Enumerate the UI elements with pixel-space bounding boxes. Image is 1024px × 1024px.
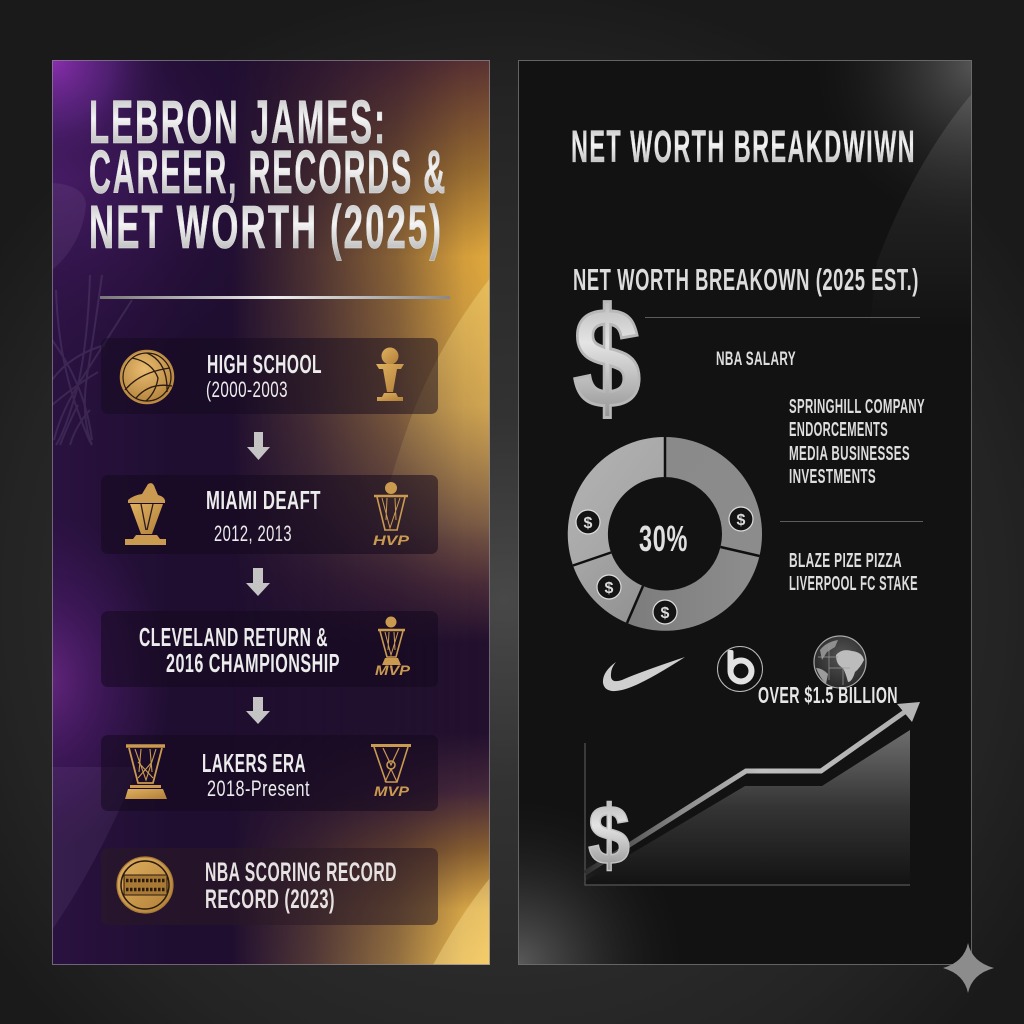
list: businesses: SPRINGHILL COMPANY xyxy=(789,396,925,418)
dollar badge: $ xyxy=(737,512,746,529)
card: cleveland xyxy=(101,611,438,687)
panel: career: CAREER, RECORDS & xyxy=(89,138,447,206)
dollar badge: $ xyxy=(584,515,593,532)
card: scoring record xyxy=(101,848,438,925)
heading: record 2023: RECORD (2023) xyxy=(205,884,335,914)
icon: trophy xyxy=(125,483,166,545)
list: stakes xyxy=(789,550,918,595)
icon: globe xyxy=(814,636,866,688)
icon: mvp trophy xyxy=(375,616,411,678)
icon: hvp trophy xyxy=(373,482,410,548)
heading: cleveland return: CLEVELAND RETURN & xyxy=(139,622,328,652)
list: businesses: ENDORCEMENTS xyxy=(789,419,888,441)
dollar badge xyxy=(597,575,621,599)
label: over 1.5 billion: OVER $1.5 BILLION xyxy=(758,682,898,708)
icon: hvp trophy: HVP xyxy=(373,532,410,548)
title divider xyxy=(100,296,450,299)
heading: miami: MIAMI DEAFT xyxy=(206,485,321,515)
icon: big dollar: $ xyxy=(573,279,641,438)
list: businesses: INVESTMENTS xyxy=(789,466,876,488)
list: stakes: BLAZE PIZE PIZZA xyxy=(789,550,902,572)
icon: sparkle xyxy=(943,943,994,993)
dollar badge xyxy=(576,510,600,534)
icon: beats logo xyxy=(718,646,762,692)
panel: career xyxy=(52,60,495,965)
arrow xyxy=(246,697,270,724)
title: LEBRON JAMES: xyxy=(89,88,387,156)
arrow xyxy=(247,432,270,460)
list: businesses: MEDIA BUSINESSES xyxy=(789,443,910,465)
heading: 2016 championship: 2016 CHAMPIONSHIP xyxy=(166,648,340,678)
icon: mvp trophy: MVP xyxy=(375,662,411,678)
heading: high school: HIGH SCHOOL xyxy=(207,349,322,379)
icon: mvp trophy: MVP xyxy=(374,783,410,799)
icon: basketball xyxy=(120,350,174,404)
heading: nba scoring record: NBA SCORING RECORD xyxy=(205,857,397,887)
text: years: (2000-2003 xyxy=(206,377,288,402)
title: NET WORTH (2025) xyxy=(89,193,443,261)
title xyxy=(89,88,447,261)
icon: chart dollar: $ xyxy=(588,788,630,882)
arrow xyxy=(246,568,270,596)
icon: trophy xyxy=(376,348,404,401)
dollar badge: $ xyxy=(605,580,614,597)
heading: lakers era: LAKERS ERA xyxy=(202,748,306,778)
icon: swoosh xyxy=(603,657,685,691)
card: lakers xyxy=(101,735,438,811)
text: years: 2012, 2013 xyxy=(214,521,292,546)
donut center value: 30% xyxy=(639,518,688,559)
line chart xyxy=(585,702,920,885)
list: businesses xyxy=(789,396,925,488)
donut chart xyxy=(568,437,762,631)
label: nba salary: NBA SALARY xyxy=(716,349,796,370)
dollar badge: $ xyxy=(661,605,670,622)
list: stakes: LIVERPOOL FC STAKE xyxy=(789,573,918,595)
icon: record medal xyxy=(117,857,173,913)
icon: net trophy xyxy=(125,746,167,799)
text: years: 2018-Present xyxy=(207,776,310,801)
divider xyxy=(780,521,923,522)
dollar badge xyxy=(729,507,753,531)
panel: net worth xyxy=(518,60,975,965)
card: high school xyxy=(101,338,438,414)
icon: mvp trophy xyxy=(371,746,411,799)
card: miami xyxy=(101,475,438,554)
divider xyxy=(645,317,920,318)
dollar badge xyxy=(653,600,677,624)
